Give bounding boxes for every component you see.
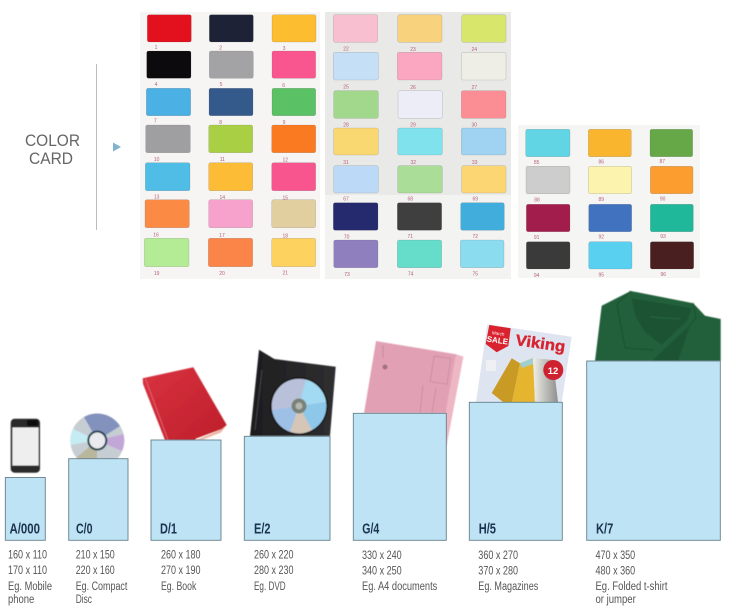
- swatch 8: 8: [219, 120, 222, 126]
- swatch 14: 14: [220, 195, 225, 201]
- swatch 74: [397, 240, 442, 278]
- envelope: K/7: [587, 361, 720, 540]
- swatch 18: [272, 200, 316, 240]
- heading: color card: CARD: [29, 150, 73, 168]
- text: K/7 sizes: or jumper: [596, 594, 636, 606]
- text: D/1 sizes: 260 x 180: [161, 550, 200, 562]
- text: C/0 sizes: Disc: [76, 594, 92, 606]
- envelope: H/5: H/5: [479, 521, 496, 537]
- swatch 13: [145, 163, 190, 200]
- swatch 22: 22: [343, 46, 349, 52]
- swatch 15: [272, 163, 316, 202]
- text: G/4 sizes: [362, 550, 437, 593]
- text: K/7 sizes: 480 x 360: [596, 566, 635, 578]
- swatch 5: 5: [220, 82, 223, 88]
- icon: red book: [143, 367, 227, 440]
- swatch 21: [272, 238, 316, 276]
- text: D/1 sizes: Eg. Book: [161, 581, 196, 593]
- swatch 67: [334, 166, 378, 202]
- swatch 70: 70: [344, 234, 350, 240]
- swatch 87: 87: [660, 159, 665, 165]
- text: D/1 sizes: [161, 550, 200, 593]
- swatch 95: 95: [599, 272, 604, 278]
- icon: green shirt: [595, 291, 721, 361]
- swatch 93: [650, 204, 693, 240]
- text: E/2 sizes: 260 x 220: [254, 550, 294, 562]
- swatch 89: 89: [599, 197, 604, 203]
- swatch 3: [272, 15, 316, 52]
- swatch 71: [397, 203, 442, 240]
- swatch 89: [588, 166, 632, 203]
- swatch 32: 32: [411, 160, 416, 166]
- sale badge: [486, 325, 511, 352]
- swatch 68: 68: [408, 196, 413, 202]
- swatch 10: [146, 125, 190, 163]
- text: A/000 sizes: [8, 550, 52, 606]
- swatch 94: 94: [534, 273, 540, 279]
- swatch 71: 71: [408, 234, 413, 240]
- swatch 33: [461, 128, 506, 166]
- panel: color card 1: [140, 12, 320, 279]
- panel: color card 2: [325, 12, 511, 279]
- text: C/0 sizes: 220 x 160: [76, 565, 115, 577]
- envelope: E/2: [244, 436, 330, 540]
- swatch 95: [589, 242, 632, 278]
- text: C/0 sizes: Eg. Compact: [76, 581, 128, 593]
- swatch 21: 21: [283, 270, 288, 276]
- swatch 91: [526, 204, 570, 241]
- swatch 1: 1: [155, 45, 158, 51]
- text: A/000 sizes: 170 x 110: [8, 565, 47, 577]
- swatch 8: [209, 88, 253, 126]
- heading: color card: COLOR: [25, 132, 80, 150]
- swatch 28: 28: [343, 122, 349, 128]
- swatch 32: [398, 128, 442, 166]
- swatch 75: 75: [473, 272, 478, 278]
- envelope: H/5: [469, 402, 562, 540]
- swatch 5: [209, 51, 253, 88]
- swatch 90: 90: [660, 196, 666, 202]
- envelope: A/000: A/000: [10, 521, 40, 537]
- swatch 10: 10: [154, 157, 160, 163]
- swatch 70: [333, 203, 378, 240]
- swatch 30: 30: [472, 122, 477, 128]
- swatch 20: [208, 238, 253, 277]
- sale badge: March: [492, 330, 505, 337]
- swatch 87: [650, 129, 693, 165]
- swatch 30: [461, 91, 506, 128]
- text: H/5 sizes: [478, 550, 538, 593]
- text: A/000 sizes: phone: [8, 594, 34, 606]
- swatch 24: 24: [472, 47, 477, 53]
- swatch 31: [334, 128, 378, 166]
- icon: pink folder: [364, 341, 463, 448]
- swatch 73: 73: [344, 272, 350, 278]
- swatch 2: 2: [219, 46, 222, 52]
- swatch 26: [397, 52, 442, 91]
- icon: dvd case: [250, 350, 336, 436]
- icon: magazine: [476, 324, 572, 402]
- swatch 86: 86: [599, 160, 604, 166]
- envelope: E/2: E/2: [254, 521, 270, 537]
- swatch 23: 23: [410, 47, 416, 53]
- swatch 9: 9: [283, 120, 286, 126]
- icon: mobile phone: [11, 419, 40, 473]
- swatch 11: [209, 125, 253, 163]
- swatch 26: 26: [410, 85, 416, 91]
- text: D/1 sizes: 270 x 190: [161, 565, 200, 577]
- swatch 74: 74: [408, 272, 414, 278]
- text: H/5 sizes: 370 x 280: [478, 566, 518, 578]
- text: E/2 sizes: Eg. DVD: [254, 581, 286, 593]
- swatch 69: [462, 166, 506, 202]
- swatch 4: 4: [155, 82, 158, 88]
- swatch 28: [334, 91, 378, 128]
- swatch 90: [650, 166, 693, 202]
- swatch 19: 19: [154, 271, 160, 277]
- swatch 94: [526, 242, 570, 279]
- swatch 75: [460, 240, 504, 278]
- text: C/0 sizes: [76, 550, 128, 606]
- swatch 12: 12: [283, 158, 288, 164]
- swatch 2: [209, 15, 253, 51]
- swatch 27: 27: [472, 85, 477, 91]
- swatch 1: [147, 15, 191, 51]
- envelope: C/0: [69, 459, 128, 540]
- swatch 25: [333, 52, 378, 90]
- swatch 85: 85: [534, 160, 540, 166]
- text: G/4 sizes: 330 x 240: [362, 550, 402, 562]
- swatch 15: 15: [283, 196, 288, 202]
- swatch 73: [334, 240, 378, 278]
- text: H/5 sizes: 360 x 270: [478, 550, 518, 562]
- swatch 33: 33: [472, 160, 478, 166]
- text: E/2 sizes: [254, 550, 294, 593]
- text: H/5 sizes: Eg. Magazines: [478, 581, 538, 593]
- price badge: 12: [548, 366, 558, 377]
- swatch 3: 3: [283, 46, 286, 52]
- sale badge: SALE: [486, 335, 509, 347]
- swatch 72: [461, 203, 504, 240]
- envelope: A/000: [5, 478, 45, 540]
- swatch 23: [398, 15, 442, 53]
- swatch 93: 93: [660, 234, 666, 240]
- envelope: K/7: K/7: [596, 521, 613, 537]
- swatch 24: [462, 15, 506, 53]
- swatch 69: 69: [473, 196, 478, 202]
- swatch 17: [209, 200, 253, 239]
- swatch 11: 11: [220, 157, 225, 163]
- swatch 6: 6: [282, 83, 285, 89]
- text: G/4 sizes: Eg. A4 documents: [362, 581, 437, 593]
- swatch 31: 31: [343, 160, 349, 166]
- swatch 19: [144, 238, 189, 277]
- swatch 22: [333, 15, 378, 52]
- text: A/000 sizes: Eg. Mobile: [8, 581, 52, 593]
- swatch 7: 7: [154, 118, 157, 124]
- swatch 16: 16: [153, 232, 159, 238]
- swatch 20: 20: [219, 271, 225, 277]
- swatch 92: 92: [599, 234, 604, 240]
- swatch 25: 25: [343, 84, 349, 90]
- swatch 85: [526, 129, 570, 166]
- swatch 86: [588, 129, 631, 166]
- swatch 27: [461, 52, 506, 91]
- text: C/0 sizes: 210 x 150: [76, 550, 115, 562]
- swatch 18: 18: [283, 234, 288, 240]
- swatch 13: 13: [154, 194, 160, 200]
- viking logo: Viking: [514, 332, 566, 356]
- icon: compact disc: [70, 412, 125, 458]
- envelope: D/1: D/1: [160, 521, 177, 537]
- text: K/7 sizes: 470 x 350: [596, 550, 635, 562]
- swatch 7: [146, 88, 191, 124]
- swatch 96: [650, 242, 694, 278]
- envelope: G/4: G/4: [362, 521, 379, 537]
- text: G/4 sizes: 340 x 250: [362, 566, 402, 578]
- text: E/2 sizes: 280 x 230: [254, 565, 294, 577]
- text: A/000 sizes: 160 x 110: [8, 550, 47, 562]
- swatch 4: [147, 51, 191, 88]
- swatch 88: [526, 166, 570, 204]
- icon: arrow: [113, 142, 121, 152]
- envelope: D/1: [151, 440, 221, 540]
- swatch 29: 29: [410, 122, 416, 128]
- swatch 72: 72: [473, 234, 478, 240]
- swatch 96: 96: [661, 272, 666, 278]
- swatch 16: [145, 200, 189, 238]
- panel: color card 3: [518, 125, 700, 279]
- swatch 92: [589, 204, 632, 240]
- envelope: C/0: C/0: [76, 521, 92, 537]
- swatch 67: 67: [343, 196, 349, 202]
- swatch 9: [272, 88, 316, 126]
- swatch 91: 91: [534, 235, 540, 241]
- swatch 29: [398, 91, 442, 128]
- swatch 88: 88: [534, 198, 540, 204]
- swatch 12: [272, 125, 316, 164]
- text: K/7 sizes: Eg. Folded t-shirt: [596, 581, 668, 593]
- swatch 6: [272, 51, 316, 89]
- envelope: G/4: [353, 413, 446, 540]
- text: K/7 sizes: [596, 550, 668, 606]
- heading: color card: [25, 132, 80, 168]
- swatch 68: [398, 166, 442, 202]
- swatch 14: [209, 163, 253, 201]
- swatch 17: 17: [219, 233, 225, 239]
